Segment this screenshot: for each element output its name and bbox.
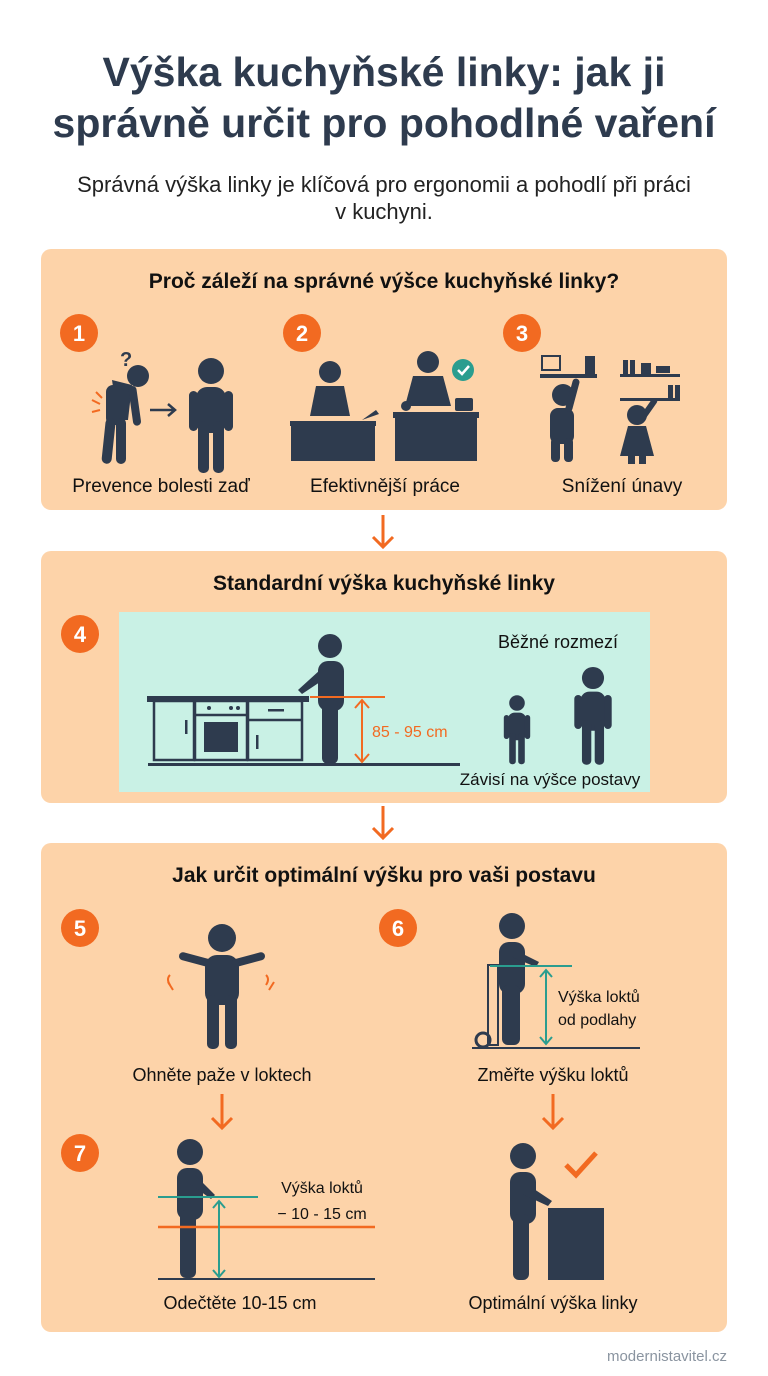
title: Výška kuchyňské linky: jak ji <box>103 49 665 95</box>
panel: how to determine: Změřte výšku loktů <box>477 1065 629 1085</box>
panel: how to determine: Odečtěte 10-15 cm <box>163 1293 317 1313</box>
icon: counters <box>290 351 479 461</box>
badge 6: 6 <box>392 916 404 941</box>
badge 2 <box>283 314 321 352</box>
badge 1 <box>60 314 98 352</box>
labels: Snížení únavy <box>562 476 683 497</box>
heading: Proč záleží na správné výšce kuchyňské linky? <box>149 270 619 293</box>
badge 1: 1 <box>73 321 85 346</box>
diagram: kitchen: Závisí na výšce postavy <box>460 770 641 789</box>
badge 2: 2 <box>296 321 308 346</box>
labels: Efektivnější práce <box>310 476 460 497</box>
badge 6 <box>379 909 417 947</box>
diagram: kitchen <box>119 612 650 792</box>
step 6 figure: Výška loktů <box>558 988 640 1006</box>
heading: Standardní výška kuchyňské linky <box>213 572 555 595</box>
subtitle: Správná výška linky je klíčová pro ergonomii a pohodlí při práci <box>77 172 691 197</box>
badge 4: 4 <box>74 622 87 647</box>
diagram: kitchen: Běžné rozmezí <box>498 632 618 652</box>
icon: reaching shelves <box>540 356 680 464</box>
arrow <box>373 515 393 547</box>
diagram: kitchen: 85 - 95 cm <box>372 724 448 741</box>
step 8 figure <box>510 1143 604 1280</box>
title <box>53 49 717 146</box>
badge 7: 7 <box>74 1141 86 1166</box>
panel: why it matters <box>41 249 727 510</box>
labels: Prevence bolesti zaď <box>72 476 250 497</box>
arrow <box>373 806 393 838</box>
badge 5: 5 <box>74 916 86 941</box>
step 7 figure <box>158 1139 375 1279</box>
step 5 figure <box>168 924 274 1049</box>
badge 5 <box>61 909 99 947</box>
badge 7 <box>61 1134 99 1172</box>
icon: back pain to healthy: ? <box>120 349 132 371</box>
badge 3: 3 <box>516 321 528 346</box>
panel: standard height <box>41 551 727 803</box>
panel: how to determine: Ohněte paže v loktech <box>132 1065 312 1085</box>
step 6 figure <box>472 913 640 1048</box>
panel: how to determine: Optimální výška linky <box>468 1293 638 1313</box>
title: správně určit pro pohodlné vaření <box>53 100 717 146</box>
panel: how to determine <box>41 843 727 1332</box>
badge 4 <box>61 615 99 653</box>
icon: back pain to healthy <box>92 349 233 473</box>
heading: Jak určit optimální výšku pro vaši postavu <box>172 864 596 887</box>
subtitle: v kuchyni. <box>335 199 433 224</box>
step 6 figure: od podlahy <box>558 1012 636 1029</box>
footer: modernistavitel.cz <box>607 1348 727 1365</box>
badge 3 <box>503 314 541 352</box>
subtitle <box>77 172 691 224</box>
step 7 figure: − 10 - 15 cm <box>277 1206 367 1223</box>
step 7 figure: Výška loktů <box>281 1179 363 1197</box>
labels <box>72 476 683 497</box>
